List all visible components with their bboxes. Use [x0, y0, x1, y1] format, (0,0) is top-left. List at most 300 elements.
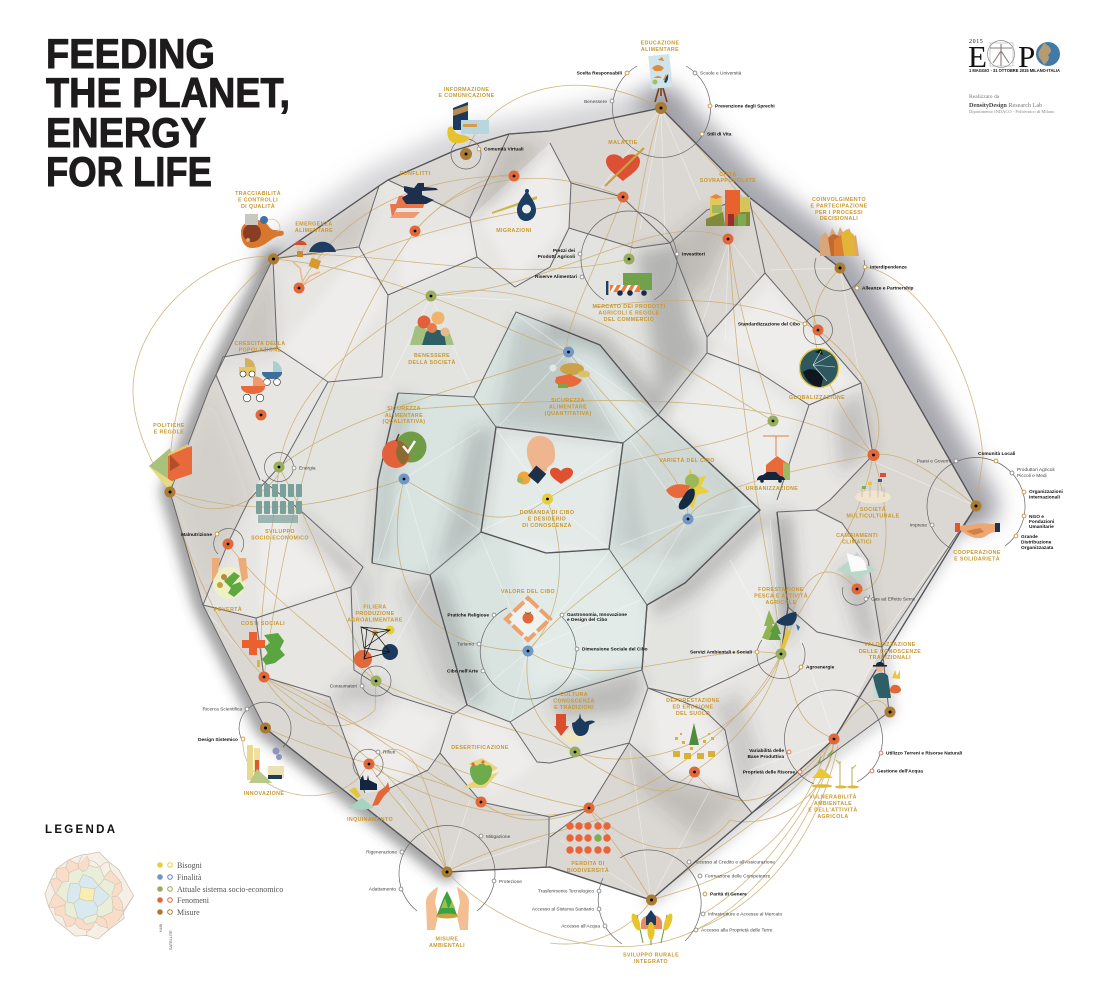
icon: tree and stumps — [673, 723, 715, 759]
icon: columns of coins — [256, 484, 302, 523]
heading: COSTI SOCIALI — [241, 621, 285, 627]
icon: food plates — [550, 363, 590, 388]
topic: varietà del cibo — [659, 457, 715, 524]
hub node — [563, 346, 574, 358]
icon: hill and plants — [812, 749, 859, 788]
satellite labels: Dimensione Sociale del Cibo — [582, 646, 648, 652]
heading: DEFORESTAZIONE — [666, 698, 720, 704]
satellite labels: Investitori — [682, 252, 705, 258]
topic: tracciabilità e controlli di qualità — [235, 190, 284, 264]
topic: città sovrappopolate — [700, 171, 756, 244]
heading: TRADIZIONALI — [869, 655, 911, 661]
icon: test tubes and factory — [247, 745, 284, 783]
topic: misure ambientali — [366, 826, 522, 949]
satellite labels: Alleanze e Partnership — [862, 286, 914, 292]
satellite label: Standardizzazione del Cibo — [738, 322, 800, 328]
title: FEEDING — [46, 30, 215, 77]
heading: AGRICOLA — [817, 814, 849, 820]
connection arcs — [133, 85, 983, 947]
heading: COOPERAZIONE — [953, 550, 1001, 556]
legend mini map — [45, 852, 134, 939]
hub node — [828, 734, 840, 744]
topic: globalizzazione — [738, 316, 845, 401]
icon: family — [410, 312, 454, 345]
satellite labels: Protezione — [499, 879, 522, 885]
legend — [45, 824, 283, 950]
icon: easel — [648, 54, 673, 102]
icon: assorted food — [666, 468, 710, 510]
icon: house, crane, car — [757, 436, 790, 483]
heading: AGRICOLE — [766, 600, 797, 606]
icon: tomato grid — [566, 822, 611, 854]
legend rows: Attuale sistema socio-economico — [177, 885, 283, 894]
heading: (QUANTITATIVA) — [544, 411, 592, 417]
heading: CRESCITA DELLA — [235, 341, 285, 347]
topic: emergenza alimentare — [293, 222, 336, 294]
icon: trees and fish — [762, 610, 800, 653]
topic: benessere della società — [408, 290, 456, 366]
topic: cambiamenti climatici — [836, 533, 915, 605]
satellite labels: Scelta Responsabili — [577, 70, 622, 76]
heading: VARIETÀ DEL CIBO — [659, 457, 715, 464]
satellite labels: Interdipendenze — [870, 264, 907, 270]
icon: flags on island — [855, 473, 891, 504]
hub node — [852, 584, 862, 594]
icon: cross and money — [242, 632, 285, 667]
heading: (QUALITATIVA) — [383, 419, 425, 425]
satellite labels — [535, 248, 705, 280]
heading: CITTÀ — [719, 171, 737, 178]
ring — [581, 211, 677, 300]
legend rows: Misure — [177, 908, 200, 917]
hub node — [570, 746, 580, 758]
hub node — [646, 894, 657, 906]
icon: arrow and teapot — [554, 713, 595, 743]
icon: hands with money — [212, 558, 248, 599]
satellite labels: Infrastrutture e Accesso al Mercato — [708, 912, 782, 918]
heading: PER I PROCESSI — [815, 210, 863, 216]
ring — [264, 452, 294, 482]
satellite labels: Formazione delle Competenze — [705, 874, 771, 880]
topic: innovazione — [198, 702, 291, 797]
heading: SOCIETÀ — [860, 506, 886, 513]
topic: società multiculturale — [846, 449, 900, 520]
heading: DOMANDA DI CIBO — [520, 510, 574, 516]
expo logo: 2015 — [969, 39, 983, 45]
ring — [757, 640, 805, 679]
hub node — [442, 866, 452, 878]
legend rows: Fenomeni — [177, 896, 210, 905]
heading: PERDITA DI — [571, 861, 605, 867]
heading: COINVOLGIMENTO — [812, 197, 866, 203]
heading: CONFLITTI — [399, 171, 431, 177]
ring — [815, 258, 865, 291]
icon: hands around forest — [426, 887, 469, 930]
topic: informazione e comunicazione — [438, 87, 524, 169]
satellite labels — [577, 70, 775, 138]
icon: dark globe — [800, 348, 838, 388]
heading: SOCIO-ECONOMICO — [251, 536, 309, 542]
hub node — [222, 538, 234, 550]
heading: URBANIZZAZIONE — [746, 486, 798, 492]
satellite labels: Mitigazione — [486, 834, 511, 840]
hub node — [689, 766, 700, 778]
dome cells — [170, 108, 976, 900]
dome shading facets — [173, 140, 880, 840]
icon: farmer — [873, 662, 901, 698]
credits — [969, 94, 1055, 114]
icon: bindle — [492, 189, 537, 221]
heading: EMERGENZA — [295, 222, 333, 228]
heavy outer and inner contours — [265, 108, 976, 900]
satellite labels: Scuole e Università — [700, 70, 742, 76]
legend rows: Bisogni — [177, 861, 203, 870]
heading: DELLA SOCIETÀ — [408, 359, 456, 366]
legend axis labels — [159, 924, 173, 950]
hub node — [268, 254, 279, 264]
satellite labels: Accesso alla Proprietà delle Terre — [701, 928, 773, 934]
topic: crescita della popolazione — [235, 341, 285, 420]
ring — [361, 666, 391, 696]
satellite labels: Base Produttiva — [747, 754, 784, 760]
hub node — [834, 262, 846, 274]
satellite labels — [366, 834, 522, 892]
title: FOR LIFE — [46, 148, 212, 195]
topic: forestazione pesca e attività agricole — [690, 587, 835, 679]
heading: DEL SUOLO — [676, 711, 710, 717]
satellite labels: Proprietà delle Risorse — [743, 770, 795, 776]
icon: prams — [239, 358, 282, 402]
topic: sviluppo rurale integrato — [532, 850, 782, 965]
ring — [842, 587, 870, 605]
icon: ham with label — [241, 214, 284, 248]
icon: handshake — [955, 523, 1000, 538]
topic: coinvolgimento e partecipazione — [810, 197, 914, 292]
credits: Realizzato da — [969, 94, 1000, 100]
legend axis labels: SATELLITE — [169, 930, 173, 950]
heading: AGROALIMENTARE — [347, 618, 403, 624]
topic: urbanizzazione — [746, 416, 798, 492]
satellite labels — [532, 860, 782, 934]
ring — [784, 690, 882, 784]
icon: books — [149, 444, 192, 490]
legend rows: Finalità — [177, 873, 202, 882]
icon: factory, bird, leaves — [348, 775, 390, 810]
satellite labels: Organizzazioni — [1029, 489, 1063, 495]
hub node — [294, 282, 304, 294]
credits: Dipartimento INDACO - Politecnico di Milano — [969, 109, 1055, 114]
heading: CONOSCENZA — [553, 698, 595, 704]
heading: DI QUALITÀ — [241, 203, 275, 210]
satellite labels: Cibo nell'Arte — [447, 668, 478, 674]
satellite labels: Utilizzo Terreni e Risorse Naturali — [886, 750, 962, 756]
title — [46, 30, 290, 195]
satellite labels: Paesi e Governi — [917, 458, 951, 464]
satellite labels: Organizzazata — [1021, 545, 1054, 551]
topic: valorizzazione delle conoscenze tradizionali — [859, 642, 921, 718]
satellite labels: e Design del Cibo — [567, 617, 607, 623]
heading: SICUREZZA — [387, 406, 421, 412]
legend heading: LEGENDA — [45, 824, 115, 836]
satellite label: Rifiuti — [383, 750, 395, 756]
topic: migrazioni — [492, 170, 537, 234]
heading: CULTURA — [560, 692, 588, 698]
heading: TRACCIABILITÀ — [235, 190, 281, 197]
hub node — [970, 500, 982, 512]
heading: AGRICOLI E REGOLE — [598, 310, 660, 316]
legend axis labels: HUB — [159, 924, 163, 932]
hub node — [398, 474, 410, 484]
icon: truck and barrier — [606, 273, 652, 296]
satellite labels: Internazionali — [1029, 494, 1060, 500]
expo logo: P — [1018, 39, 1035, 74]
hub node — [618, 192, 628, 202]
heading: INNOVAZIONE — [244, 791, 284, 797]
heading: CAMBIAMENTI — [836, 533, 878, 539]
heading: DESERTIFICAZIONE — [451, 745, 509, 751]
heading: AMBIENTALE — [814, 801, 852, 807]
heading: E SOLIDARIETÀ — [954, 556, 1000, 562]
icon: raised hands — [820, 227, 859, 256]
heading: DI CONOSCENZA — [522, 523, 572, 529]
hub node — [884, 706, 896, 718]
heading: E PARTECIPAZIONE — [810, 204, 868, 210]
title: ENERGY — [46, 109, 206, 156]
hub node — [476, 796, 486, 808]
satellite label: Gas ad Effetto Serra — [871, 596, 915, 602]
topic: costi sociali — [241, 621, 285, 682]
expo logo: E — [968, 39, 987, 74]
topic: valore del cibo — [447, 589, 648, 699]
legend rows — [157, 861, 283, 917]
hub node — [655, 102, 667, 114]
satellite labels: Pratiche Religiose — [447, 612, 489, 618]
hub node — [410, 226, 420, 236]
hub node — [370, 676, 382, 686]
ring — [214, 528, 244, 554]
heading: VULNERABILITÀ — [809, 794, 857, 800]
satellite labels: Rigenerazione — [366, 850, 397, 856]
icon: parachutes — [293, 241, 336, 284]
ring — [353, 749, 383, 778]
satellite labels: Accesso al Credito e all'Assicurazione — [694, 860, 775, 866]
expo logo: 1 MAGGIO - 31 OTTOBRE 2015 MILANO-ITALIA — [969, 68, 1061, 73]
satellite labels: Design Sistemico — [198, 737, 238, 743]
satellite labels: Piccoli e Medi — [1017, 473, 1047, 479]
heading: INFORMAZIONE — [444, 87, 489, 93]
credits: DensityDesign Research Lab — [969, 102, 1042, 109]
heading: VALORIZZAZIONE — [864, 642, 916, 648]
hub node — [812, 324, 824, 336]
satellite labels: Grande — [1021, 534, 1038, 540]
hub node — [522, 646, 534, 656]
satellite label: Comunità Virtuali — [484, 146, 524, 152]
heading: BIODIVERSITÀ — [567, 867, 609, 874]
heading: GLOBALIZZAZIONE — [789, 395, 845, 401]
heading: MERCATO DEI PRODOTTI — [592, 304, 666, 310]
hub node — [164, 486, 176, 498]
satellite labels: Accesso all'Acqua — [561, 924, 600, 930]
satellite labels: Accesso al Sistema Sanitario — [532, 906, 594, 912]
topic: educazione alimentare — [577, 40, 775, 157]
satellite labels: Adattamento — [369, 886, 396, 892]
topic: domanda di cibo — [517, 436, 574, 529]
topic: inquinamento — [347, 749, 395, 823]
hub node — [624, 254, 634, 264]
icon: head, tablet, fruit, heart — [517, 436, 573, 484]
topic: cooperazione e solidarietà — [910, 451, 1063, 562]
icon: heart with arrow — [605, 148, 644, 186]
topic: vulnerabilità ambientale — [743, 690, 962, 820]
heading: MALATTIE — [608, 140, 638, 146]
satellite labels: Gestione dell'Acqua — [877, 768, 923, 774]
topic: politiche e regole — [149, 423, 192, 498]
dark cell outlines — [170, 108, 976, 900]
ring — [612, 66, 711, 157]
heading: DELLE CONOSCENZE — [859, 649, 921, 655]
hub node — [460, 148, 472, 160]
heading: MULTICULTURALE — [846, 514, 900, 520]
satellite labels: Prezzi dei — [553, 248, 575, 254]
satellite labels: Trasferimento Tecnologico — [538, 888, 594, 894]
icon: tomato and check seal — [382, 432, 426, 468]
heading: CLIMATICI — [842, 540, 872, 546]
heading: VALORE DEL CIBO — [501, 589, 555, 595]
satellite labels: Comunità Locali — [978, 451, 1015, 457]
satellite labels: Benessere — [584, 99, 607, 105]
topic: sviluppo socio-economico — [251, 452, 316, 542]
satellite labels: Turismo — [457, 642, 474, 648]
satellite labels: Variabilità delle — [749, 748, 784, 754]
icon: cactus — [463, 758, 499, 788]
heading: EDUCAZIONE — [641, 40, 679, 46]
heading: INQUINAMENTO — [347, 817, 393, 823]
topic: filiera produzione agroalimentare — [330, 604, 403, 696]
topic: conflitti — [390, 171, 438, 236]
heading: AMBIENTALI — [429, 943, 465, 949]
heading: E DESIDERIO — [528, 516, 566, 522]
heading: E TRADIZIONI — [554, 705, 594, 711]
hub node — [776, 648, 786, 660]
hub node — [768, 416, 778, 426]
satellite labels: Distribuzione — [1021, 540, 1052, 546]
icon: wheat and silo — [630, 910, 674, 945]
icon: network — [354, 626, 398, 668]
ring — [451, 139, 481, 169]
topic: perdita di biodiversità — [566, 802, 611, 874]
hub node — [542, 494, 553, 504]
heading: PESCA E ATTIVITÀ — [754, 592, 808, 600]
hub node — [508, 170, 520, 182]
heading: ALIMENTARE — [385, 413, 423, 419]
heading: POLITICHE — [153, 423, 185, 429]
satellite labels: Umanitarie — [1029, 524, 1054, 530]
heading: SOVRAPPOPOLATE — [700, 178, 756, 184]
heading: E DELL'ATTIVITÀ — [808, 806, 858, 814]
hub node — [868, 449, 880, 461]
satellite labels: Servizi Ambientali e Sociali — [690, 650, 752, 656]
title: THE PLANET, — [46, 69, 290, 116]
hub node — [364, 758, 374, 770]
topic: sicurezza alimentare quantitativa — [544, 346, 592, 417]
hub node — [256, 410, 266, 420]
heading: MISURE — [436, 936, 459, 942]
hub node — [274, 462, 284, 472]
satellite labels: Parità di Genere — [710, 892, 747, 898]
satellite labels: Agroenergie — [806, 664, 835, 670]
dome drop shadow — [170, 108, 976, 900]
ring — [804, 316, 832, 344]
heading: DEL COMMERCIO — [604, 317, 654, 323]
heading: DECISIONALI — [820, 216, 858, 222]
heading: ED EROSIONE — [673, 704, 714, 710]
icon: hands around tomato — [506, 598, 550, 640]
icon: polar bear on ice — [837, 552, 877, 582]
topic: mercato dei prodotti agricoli — [535, 211, 705, 323]
hub node — [260, 722, 271, 734]
ring — [598, 850, 701, 944]
topic: cultura conoscenza e tradizioni — [553, 692, 595, 758]
icon: buildings — [706, 190, 750, 226]
satellite labels — [910, 451, 1063, 551]
satellite labels: Ricerca Scientifica — [203, 706, 242, 712]
satellite labels — [855, 264, 914, 292]
heading: POPOLAZIONE — [239, 348, 281, 354]
heading: SVILUPPO — [265, 529, 295, 535]
hub node — [258, 672, 270, 682]
satellite labels: Prevenzione degli Sprechi — [715, 104, 775, 110]
icon: tank and boats — [390, 183, 438, 218]
satellite label: Energia — [299, 466, 316, 472]
facet hairlines — [205, 108, 976, 900]
heading: ALIMENTARE — [295, 228, 333, 234]
hub node — [722, 234, 734, 244]
satellite label: Malnutrizione — [181, 532, 212, 538]
satellite labels: Prodotti Agricoli — [538, 254, 575, 260]
satellite labels — [690, 650, 835, 670]
satellite labels: Gastronomia, Innovazione — [567, 612, 627, 618]
hub node — [426, 290, 436, 302]
heading: ALIMENTARE — [549, 404, 587, 410]
satellite labels: Produttori Agricoli — [1017, 467, 1055, 473]
hub node — [682, 514, 694, 524]
heading: E CONTROLLI — [238, 198, 278, 204]
heading: PRODUZIONE — [355, 611, 395, 617]
heading: MIGRAZIONI — [496, 228, 532, 234]
topic: desertificazione — [451, 745, 509, 808]
icon: book, bananas, card — [447, 102, 489, 143]
satellite labels: Imprese — [910, 522, 927, 528]
satellite labels — [447, 612, 648, 674]
topic: deforestazione — [666, 698, 720, 778]
ring — [480, 608, 576, 699]
satellite labels: Riserve Alimentari — [535, 274, 577, 280]
satellite labels — [743, 748, 962, 776]
heading: SVILUPPO RURALE — [623, 952, 679, 958]
satellite labels: Fondazioni — [1029, 519, 1054, 525]
heading: POVERTÀ — [214, 606, 242, 613]
satellite labels: Stili di Vita — [707, 132, 732, 138]
topic: malattie — [605, 140, 644, 202]
ring — [927, 457, 1025, 548]
heading: E COMUNICAZIONE — [438, 93, 495, 99]
satellite label: Consumatori — [330, 684, 357, 690]
satellite labels — [198, 706, 249, 743]
expo logo — [968, 39, 1061, 74]
heading: INTEGRATO — [634, 959, 668, 965]
ring — [239, 702, 291, 747]
heading: E REGOLE — [154, 430, 184, 436]
